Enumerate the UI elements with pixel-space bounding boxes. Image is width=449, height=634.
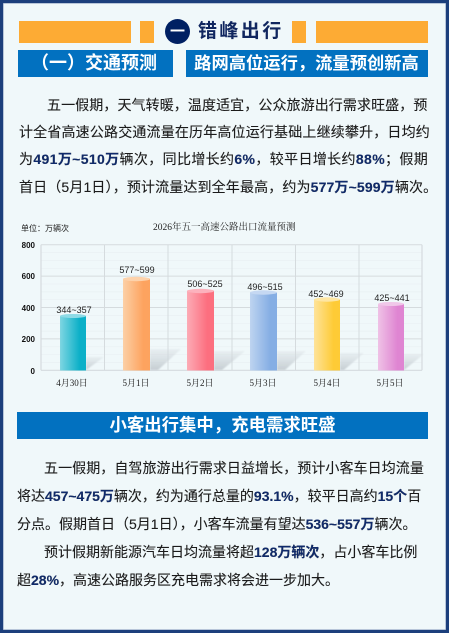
y axis labels (22, 241, 36, 376)
heading: 交通预测: （一）交通预测 (31, 53, 157, 73)
bar: 5月3日: 5月3日 (249, 378, 277, 388)
y axis labels: 200 (22, 335, 36, 344)
bar: 4月30日: 4月30日 (56, 378, 88, 388)
text block: passenger cars and charging demand: 将达457~475万辆次，约为通行总量的93.1%，较平日高约15个百 (17, 488, 421, 504)
heading: 路网高位运行 (186, 50, 428, 77)
text block: traffic forecast (19, 97, 437, 195)
plot grid (41, 245, 422, 370)
header: section title (19, 19, 428, 44)
text block: passenger cars and charging demand: 分点。假期首日（5月1日），小客车流量有望达536~557万辆次。 (17, 516, 416, 532)
orange strip far right (316, 21, 428, 43)
bar shadows (86, 349, 424, 370)
bar: 5月4日 (308, 289, 344, 388)
orange strip far left (19, 21, 131, 43)
bar: 5月5日: 5月5日 (376, 378, 404, 388)
bar: 5月1日: 5月1日 (122, 378, 150, 388)
bar: 5月3日 (247, 282, 283, 388)
icon: number badge (165, 19, 190, 44)
text block: traffic forecast: 首日（5月1日），预计流量达到全年最高，约为577万~599万辆次。 (19, 179, 437, 195)
bar: 5月2日: 506~525 (187, 279, 223, 289)
bar: 5月5日 (374, 293, 410, 388)
bar chart: holiday traffic forecast (21, 221, 423, 388)
bar: 5月1日: 577~599 (119, 265, 155, 275)
y axis labels: 0 (31, 367, 36, 376)
text block: passenger cars and charging demand: 预计假期新能源汽车日均流量将超128万辆次，占小客车比例 (44, 544, 417, 560)
bar: 4月30日 (56, 305, 92, 388)
orange strip near left (140, 21, 154, 43)
bar: 5月4日: 5月4日 (313, 378, 341, 388)
text block: passenger cars and charging demand: 超28%，高速公路服务区充电需求将会进一步加大。 (17, 572, 339, 588)
orange strip near right (292, 21, 306, 43)
text block: traffic forecast: 计全省高速公路交通流量在历年高位运行基础上继续攀升，日均约 (19, 124, 430, 140)
y axis labels: 400 (22, 304, 36, 313)
text block: passenger cars and charging demand (17, 460, 424, 588)
text block: passenger cars and charging demand: 五一假期，自驾旅游出行需求日益增长，预计小客车日均流量 (44, 460, 424, 476)
bar: 5月5日: 425~441 (374, 293, 410, 303)
heading: 小客出行集中: 小客出行集中，充电需求旺盛 (109, 415, 336, 435)
y axis labels: 600 (22, 272, 36, 281)
heading: 路网高位运行: 路网高位运行，流量预创新高 (194, 53, 419, 73)
chart unit label: 单位：万辆次 (21, 223, 69, 233)
heading: 错峰出行: 错峰出行 (198, 21, 284, 42)
text block: traffic forecast: 为491万~510万辆次，同比增长约6%，较平日增长约88%；假期 (19, 151, 428, 167)
bar: 5月1日 (119, 265, 155, 388)
bar: 5月4日: 452~469 (308, 289, 344, 299)
bar: 5月2日: 5月2日 (186, 378, 214, 388)
chart title: 2026年五一高速公路出口流量预测 (153, 221, 296, 233)
bar: 5月3日: 496~515 (247, 282, 283, 292)
heading: 小客出行集中 (17, 412, 428, 439)
icon: number badge: 一 (170, 23, 185, 40)
bar: 5月2日 (186, 279, 223, 388)
heading: 交通预测 (18, 50, 173, 77)
y axis labels: 800 (22, 241, 36, 250)
bar: 4月30日: 344~357 (56, 305, 92, 315)
text block: traffic forecast: 五一假期，天气转暖，温度适宜，公众旅游出行需求旺盛，预 (47, 97, 427, 113)
